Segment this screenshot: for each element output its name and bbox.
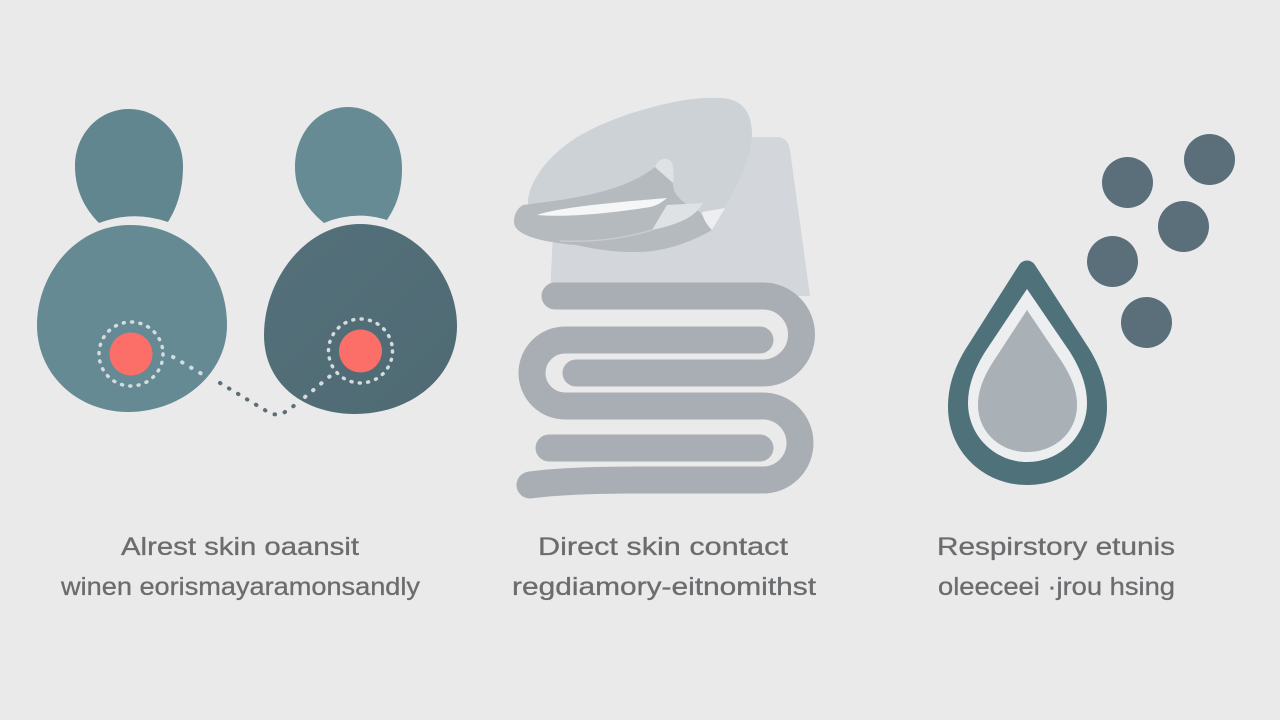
icon: right person <box>264 107 457 414</box>
icon: folded cloth back panel <box>550 137 810 296</box>
caption: direct contact <box>512 533 816 601</box>
caption: skin contact: Alrest skin oaansit <box>121 533 359 561</box>
caption: skin contact: winen eorismayaramonsandly <box>60 573 421 601</box>
icon: left person <box>37 109 227 412</box>
caption: respiratory <box>937 533 1175 601</box>
arrow: dotted transmission path <box>173 357 335 414</box>
caption: direct contact: Direct skin contact <box>538 533 788 561</box>
icon: left lesion <box>99 322 163 386</box>
caption: respiratory: Respirstory etunis <box>937 533 1175 561</box>
icon: droplet particles <box>1087 134 1235 348</box>
icon: right lesion <box>328 319 392 383</box>
caption: skin contact <box>60 533 421 601</box>
icon: water drop <box>948 260 1107 485</box>
panel: respiratory droplets <box>948 134 1235 485</box>
icon: crumpled cloth <box>514 98 752 252</box>
panel: skin contact between two people <box>37 107 457 414</box>
icon: stacked folded towels <box>530 296 802 485</box>
caption: respiratory: oleeceei ·jrou hsing <box>938 573 1175 601</box>
caption: direct contact: regdiamory-eitnomithst <box>512 573 816 601</box>
panel: contaminated towels <box>514 98 810 485</box>
